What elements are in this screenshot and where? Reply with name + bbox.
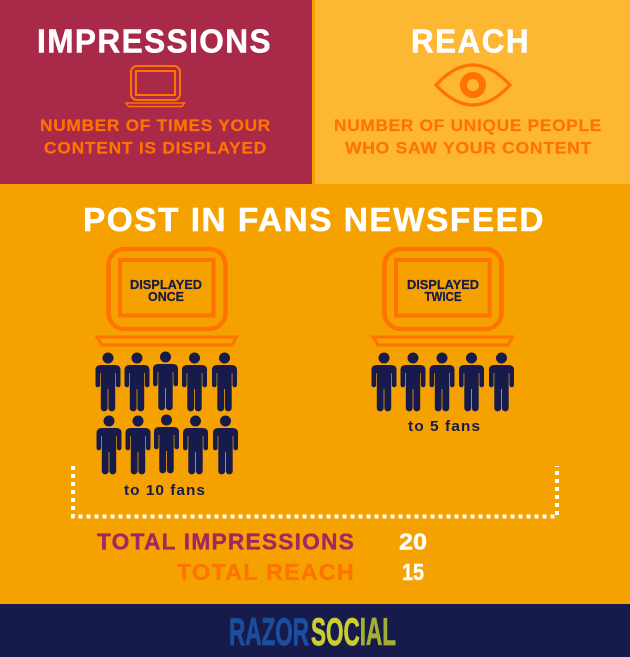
description: impressions [40,117,271,158]
heading: post in fans newsfeed: POST IN FANS NEWSFEED [83,201,545,238]
label: displayed twice [407,278,479,304]
heading: reach: REACH [411,22,530,60]
icon: large laptop displayed once [97,249,236,345]
logo: razorsocial: SOCIAL [311,611,396,654]
caption: to 5 fans: to 5 fans [408,418,481,435]
scenario: displayed once [96,249,238,499]
icon: laptop [126,66,184,106]
panel: reach [315,0,630,184]
panel: impressions [0,0,312,184]
label: displayed twice: TWICE [424,290,462,304]
logo: razorsocial: RAZOR [229,611,309,654]
people: ten fans [96,352,238,474]
label: displayed once: DISPLAYED [130,278,202,292]
footer [0,604,630,657]
caption: to 10 fans: to 10 fans [124,482,206,499]
label: displayed once [130,278,202,304]
total reach label: TOTAL REACH [177,559,355,585]
heading: impressions: IMPRESSIONS [37,22,272,60]
description: reach: WHO SAW YOUR CONTENT [345,140,592,158]
label: displayed once: ONCE [148,290,184,304]
icon: eye [436,65,510,105]
scenario: displayed twice [372,249,514,435]
description: reach: NUMBER OF UNIQUE PEOPLE [334,117,602,135]
total reach value: 15 [402,559,424,585]
description: impressions: CONTENT IS DISPLAYED [44,140,267,158]
total impressions label: TOTAL IMPRESSIONS [97,528,355,554]
totals [97,528,427,585]
bracket: dotted total [73,466,557,516]
description: reach [334,117,602,158]
label: displayed twice: DISPLAYED [407,278,479,292]
people: five fans [372,352,514,411]
description: impressions: NUMBER OF TIMES YOUR [40,117,271,135]
total impressions value: 20 [399,528,427,554]
icon: large laptop displayed twice [373,249,512,345]
